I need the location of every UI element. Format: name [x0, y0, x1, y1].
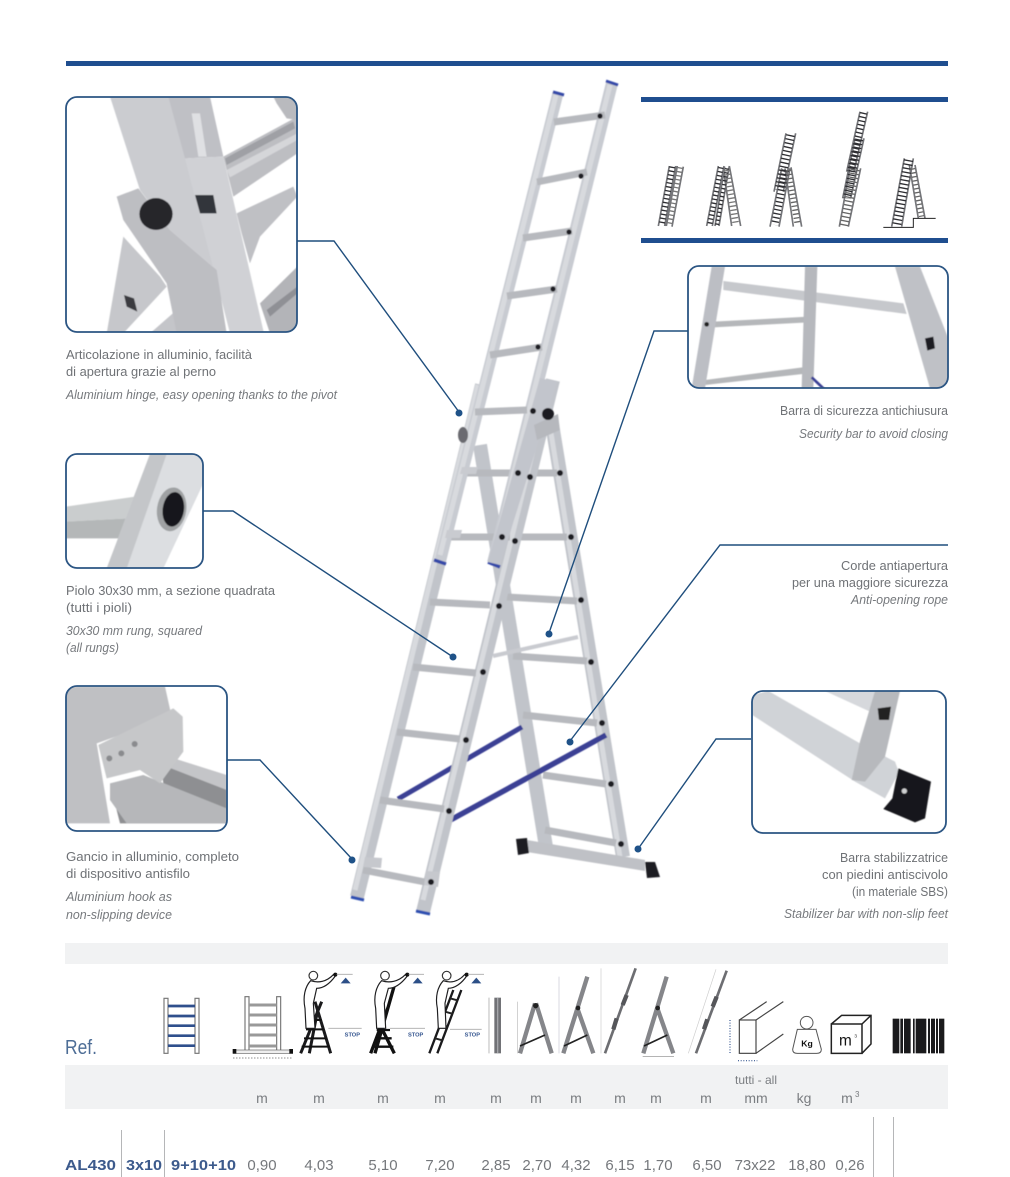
text: rope caption — [792, 559, 948, 607]
table row: AL430: 9+10+10 — [171, 1157, 236, 1174]
stop labels: STOP — [465, 1032, 480, 1038]
icon: A-frame half extended — [559, 977, 593, 1053]
icon: working height leaning — [429, 971, 484, 1053]
icon: A-frame low — [643, 977, 674, 1057]
table units: mm — [744, 1090, 768, 1106]
icon: base width ladder — [233, 997, 293, 1058]
table bands — [65, 943, 948, 1109]
text: hinge caption — [65, 348, 338, 402]
table icons right — [517, 968, 944, 1061]
icon: A-frame closed — [517, 1002, 552, 1053]
icon: volume cube — [831, 1015, 871, 1053]
table units: m — [313, 1090, 325, 1106]
table units: m — [700, 1090, 712, 1106]
icon: working height A-frame — [301, 971, 362, 1053]
text: security bar caption: Barra di sicurezza antichiusura — [780, 404, 948, 418]
table units: kg — [797, 1090, 811, 1106]
table row: AL430 — [65, 1117, 894, 1177]
text: hook caption: Gancio in alluminio, completo — [66, 850, 239, 864]
table units: m — [530, 1090, 542, 1106]
panel: hinge photo — [66, 97, 297, 333]
heading: Ref.: Ref. — [65, 1037, 97, 1059]
rung holes — [428, 113, 624, 885]
panel: hook photo — [66, 686, 227, 831]
table row: AL430: 2,70 — [522, 1157, 552, 1174]
diagram: stacked ladder — [658, 166, 683, 227]
table units: m — [490, 1090, 502, 1106]
text: rung caption: Piolo 30x30 mm, a sezione quadrata — [66, 584, 275, 598]
front section — [351, 380, 553, 914]
icon: sections ladder — [164, 998, 199, 1053]
stop labels — [345, 1032, 480, 1038]
panel: rung photo — [66, 454, 203, 568]
table units — [256, 1073, 860, 1106]
table row: AL430: AL430 — [65, 1157, 116, 1174]
text: security bar caption: Security bar to avoid closing — [799, 427, 948, 441]
panel: folding diagrams — [641, 97, 948, 243]
table units: m — [256, 1090, 268, 1106]
icon: closed ladder — [489, 998, 501, 1053]
text: stabilizer caption: con piedini antiscivolo — [822, 868, 948, 882]
blue spreader ropes — [398, 727, 606, 823]
table row: AL430: 5,10 — [368, 1157, 398, 1174]
back section — [480, 430, 623, 857]
text: hinge caption: Aluminium hinge, easy opening thanks to the pivot — [65, 388, 338, 402]
table row: AL430: 6,50 — [692, 1157, 722, 1174]
table units: m — [650, 1090, 662, 1106]
text: rope caption: Anti-opening rope — [850, 593, 948, 607]
top rule — [66, 61, 948, 66]
text: stabilizer caption: Stabilizer bar with non-slip feet — [784, 907, 948, 921]
icon: volume cube: m — [839, 1032, 852, 1049]
table row: AL430: 3x10 — [126, 1157, 162, 1174]
text: rope caption: per una maggiore sicurezza — [792, 576, 948, 590]
icon: volume cube: 3 — [854, 1033, 857, 1038]
table row: AL430: 4,32 — [561, 1157, 591, 1174]
table units: 3 — [855, 1090, 860, 1099]
icon: weight — [793, 1016, 821, 1053]
diagram: A-frame — [707, 166, 741, 226]
stop labels: STOP — [345, 1032, 360, 1038]
text: hook caption: Aluminium hook as — [65, 890, 172, 904]
stop labels: STOP — [408, 1032, 424, 1038]
text: rung caption: (tutti i pioli) — [66, 601, 132, 615]
main ladder — [351, 81, 660, 914]
text: hook caption: non-slipping device — [66, 908, 172, 922]
table units: m — [377, 1090, 389, 1106]
table row: AL430: 0,26 — [835, 1157, 865, 1174]
text: hook caption — [65, 850, 239, 922]
leader lines — [203, 241, 948, 864]
text: hinge caption: di apertura grazie al perno — [66, 365, 216, 379]
text: stabilizer caption — [784, 851, 948, 921]
text: rung caption: 30x30 mm rung, squared — [66, 624, 203, 638]
icon: straight full — [688, 969, 727, 1053]
text: stabilizer caption: (in materiale SBS) — [852, 885, 948, 899]
table units: m — [434, 1090, 446, 1106]
table row: AL430: 2,85 — [481, 1157, 511, 1174]
panel: stabilizer foot photo — [752, 691, 946, 833]
table row: AL430: 6,15 — [605, 1157, 635, 1174]
diagram: A-frame extended — [770, 133, 802, 227]
icon: profile section — [730, 1002, 783, 1061]
table units: m — [614, 1090, 626, 1106]
table units: tutti - all — [735, 1073, 777, 1087]
table row: AL430: 1,70 — [643, 1157, 673, 1174]
icon: straight double — [601, 968, 636, 1053]
table row: AL430: 18,80 — [788, 1157, 826, 1174]
icon: weight: Kg — [801, 1038, 813, 1048]
table row: AL430: 7,20 — [425, 1157, 455, 1174]
icon: barcode — [893, 1019, 944, 1053]
stabilizer bar — [516, 838, 660, 878]
text: rung caption — [66, 584, 275, 655]
text: rung caption: (all rungs) — [66, 641, 119, 655]
table row: AL430: 73x22 — [735, 1157, 775, 1174]
table row: AL430: 0,90 — [247, 1157, 277, 1174]
diagram: on stairs — [892, 158, 925, 227]
fly section — [434, 81, 618, 567]
text: stabilizer caption: Barra stabilizzatrice — [840, 851, 948, 865]
icon: working height step — [371, 971, 425, 1053]
panel: security bar photo — [688, 266, 948, 389]
table units: m — [570, 1090, 582, 1106]
text: security bar caption — [780, 404, 948, 441]
text: rope caption: Corde antiapertura — [841, 559, 948, 573]
table row: AL430: 4,03 — [304, 1157, 334, 1174]
table icons left — [164, 971, 501, 1058]
diagram: fully extended — [839, 112, 868, 227]
table units: m — [841, 1090, 853, 1106]
text: hinge caption: Articolazione in alluminio, facilità — [66, 348, 252, 362]
security bar — [493, 637, 578, 656]
text: hook caption: di dispositivo antisfilo — [66, 867, 190, 881]
